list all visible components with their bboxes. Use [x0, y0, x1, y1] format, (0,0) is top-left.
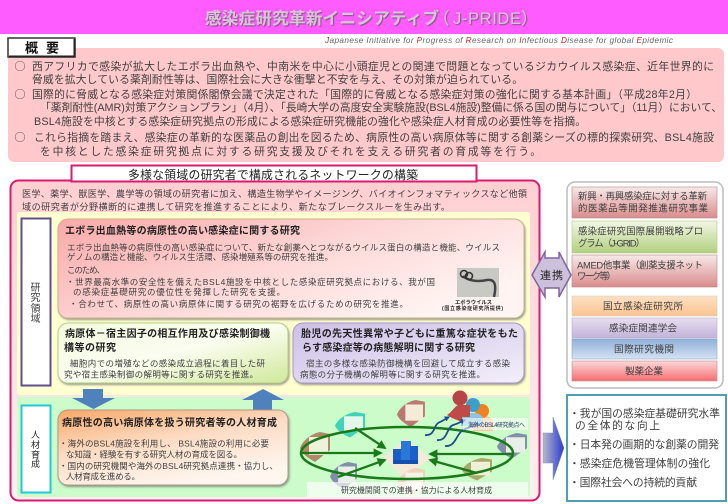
icon: building brown top	[397, 400, 425, 427]
panel: network	[10, 180, 540, 500]
label: human resources: 育	[31, 449, 40, 460]
heading: overview label: 概 要	[25, 40, 59, 56]
panel: Ebola research: エボラ出血熱等の病原性の高い感染症に関する研究	[65, 224, 300, 237]
partner: J-GRID	[572, 221, 717, 253]
title bar: ）	[521, 9, 538, 28]
label: research area: 領	[30, 302, 40, 315]
panel: outcomes: ・我が国の感染症基礎研究水準	[569, 406, 720, 420]
partner: NIID: 国立感染症研究所	[603, 300, 683, 312]
diagram: collaboration network	[300, 390, 528, 497]
panel: human resource development: 病原性の高い病原体を扱う研究者等の人材育成	[62, 416, 277, 429]
partner: societies	[572, 318, 717, 338]
intro text	[22, 188, 527, 212]
partner: J-GRID: グラム（J-GRID）	[578, 238, 645, 248]
label: research area: 究	[30, 291, 40, 304]
subtitle: Japanese Initiative for Progress of Research on Infectious Disease for global Epidemic	[324, 36, 673, 45]
partner: emerging disease programme	[572, 187, 717, 218]
icon: faded building bottom	[397, 468, 425, 496]
panel: Ebola research: エボラ出血熱等の病原性の高い感染症について、新たな創薬へとつながるウイルス蛋白の構造と機能、ウイルス	[67, 242, 500, 252]
panel: Ebola research: ・合わせて、病原性の高い病原体に関する研究の裾野を広げるための研究を推進。	[69, 299, 408, 309]
panel: fetal disorder research	[293, 323, 524, 383]
panel: overview	[8, 48, 724, 162]
panel: fetal disorder research: らす感染症等の病態解明に関する研究	[302, 341, 475, 354]
icon: building teal	[335, 412, 365, 438]
title bar: （	[433, 9, 450, 28]
overview text: を中核とした感染症研究拠点に対する研究支援及びそれを支える研究者の育成等を行う。	[40, 144, 541, 158]
partner: AMED	[572, 255, 717, 287]
band: research area	[17, 212, 530, 395]
overview text: 国際的に脅威となる感染症対策関係閣僚会議で決定された「国際的に脅威となる感染症対策の強化に関する基本計画」（平成28年2月）	[32, 87, 697, 101]
partner: emerging disease programme: 新興・再興感染症に対する革新	[578, 190, 707, 202]
panel: Ebola research: の感染症基礎研究の優位性を発揮した研究を支援。	[73, 287, 285, 297]
partner: J-GRID: 感染症研究国際展開戦略プロ	[578, 226, 703, 236]
partner: societies: 感染症関連学会	[609, 322, 677, 334]
icon: building blue-grey left	[330, 462, 357, 489]
arrow: down	[72, 389, 115, 409]
overview text: BSL4施設を中核とする感染症研究拠点の形成による感染症研究機能の強化や感染症人材育成の必要性等を指摘。	[34, 114, 586, 128]
panel: outcomes: ・日本発の画期的な創薬の開発	[569, 437, 719, 451]
partner: pharma	[572, 361, 717, 381]
label: research area	[22, 218, 50, 386]
icon: building brown left	[300, 432, 330, 462]
center diamond	[383, 438, 430, 480]
panel: human resource development: な知識・経験を有する研究人材の育成を図る。	[66, 450, 242, 460]
arrow: collaboration	[532, 252, 571, 297]
panel: fetal disorder research: 病態の分子機構の解明等に関する研究を推進。	[300, 370, 485, 380]
partner: pharma: 製薬企業	[625, 366, 663, 378]
icon: building blue-grey right	[497, 433, 527, 458]
panel: human resource development: ・国内の研究機関や海外のBSL4研究拠点連携・協力し、	[59, 461, 278, 471]
caption: Ebola virus: エボラウイルス	[455, 298, 492, 306]
panel: Ebola research: ・世界最高水準の安全性を備えたBSL4施設を中核とした感染症研究拠点における、我が国	[66, 277, 435, 287]
partner: international institutes	[572, 339, 717, 359]
partner: AMED: AMED他事業（創薬支援ネット	[577, 260, 703, 270]
title bar	[0, 0, 728, 34]
image: Ebola virus	[457, 268, 499, 297]
caption: Ebola virus: (国立感染症研究所提供)	[442, 305, 503, 312]
partner: NIID	[572, 296, 717, 316]
band: human resources	[17, 397, 530, 497]
title bar: J-PRIDE	[453, 10, 521, 28]
bottom caption	[307, 482, 528, 497]
overview text: ○	[14, 86, 26, 102]
label: human resources: 材	[31, 439, 40, 450]
heading: network	[72, 166, 476, 182]
network ring	[301, 427, 513, 479]
arrow: up	[242, 389, 284, 411]
panel: Ebola research	[58, 219, 524, 318]
panel: host factor research: 病原体－宿主因子の相互作用及び感染制御機	[65, 327, 270, 340]
panel: human resource development: ・海外のBSL4施設を利用し、 BSL4施設の利用に必要	[59, 438, 269, 448]
panel: human resource development: 人材育成を進める。	[66, 472, 140, 482]
partner: emerging disease programme: 的医薬品等開発推進研究事業	[578, 202, 709, 214]
network arrows	[302, 428, 513, 477]
label: human resources: 成	[31, 458, 40, 469]
label: human resources: 人	[31, 430, 40, 440]
icon: researchers	[447, 390, 493, 431]
panel: outcomes: の全体的な向上	[575, 418, 660, 432]
caption: Ebola virus	[442, 298, 503, 312]
panel: fetal disorder research: 宿主の多様な感染防御機構を回避して成立する感染	[306, 358, 510, 368]
panel: host factor research	[58, 323, 288, 383]
partner: international institutes: 国際研究機関	[614, 344, 674, 356]
label: research area: 研	[30, 282, 40, 294]
label: human resources	[22, 406, 50, 492]
panel: Ebola research: ゲノムの構造と機能、ウイルス生活環、感染増殖系等の研究を推進。	[67, 252, 333, 262]
overview text	[14, 58, 722, 158]
icon: central building	[393, 441, 418, 464]
panel: human resource development	[58, 410, 288, 485]
label: research area: 域	[30, 312, 40, 325]
heading: network: 多様な領域の研究者で構成されるネットワークの構築	[128, 168, 418, 182]
arrow: outcomes	[543, 417, 564, 480]
panel: outcomes	[567, 395, 726, 501]
panel: host factor research: 究や宿主感染制御の解明等に関する研究を推進。	[64, 370, 258, 380]
overview text: 西アフリカで感染が拡大したエボラ出血熱や、中南米を中心に小頭症児との関連で問題となっているジカウイルス感染症、近年世界的に	[32, 59, 714, 73]
overseas label	[463, 418, 528, 430]
panel: fetal disorder research: 胎児の先天性異常や子どもに重篤な症状をもた	[301, 327, 518, 340]
bottom caption: 研究機関間での連携・協力による人材育成	[341, 485, 492, 495]
panel: Ebola research: このため、	[67, 265, 105, 275]
icon: building olive	[462, 458, 492, 480]
overview text: これら指摘を踏まえ、感染症の革新的な医薬品の創出を図るため、病原性の高い病原体等に関する創薬シーズの標的探索研究、BSL4施設	[34, 130, 714, 144]
title bar: 感染症研究革新イニシアティブ	[205, 8, 440, 28]
overview text: ○	[14, 58, 26, 74]
intro text: 域の研究者が分野横断的に連携して研究を推進することにより、新たなブレークスルーを生み出す。	[22, 201, 450, 212]
overview text: 「薬剤耐性(AMR)対策アクションプラン」（4月）、「長崎大学の高度安全実験施設(BSL4施設)整備に係る国の関与について」（11月）において、	[40, 100, 722, 114]
panel: host factor research: 細胞内での増殖などの感染成立過程に着目した研	[70, 358, 265, 368]
overseas label: 海外のBSL4研究拠点へ	[468, 421, 525, 429]
overview text: 脅威を拡大している薬剤耐性等は、国際社会に大きな衝撃と不安を与え、その対策が迫られている。	[32, 72, 523, 86]
panel: partners	[567, 182, 723, 388]
heading: overview label	[8, 38, 75, 57]
overview text: ○	[14, 129, 26, 145]
partner: AMED: ワーク等）	[577, 270, 616, 282]
panel: outcomes: ・国際社会への持続的貢献	[569, 475, 697, 489]
panel: host factor research: 構等の研究	[64, 341, 116, 354]
intro text: 医学、薬学、獣医学、農学等の領域の研究者に加え、構造生物学やイメージング、バイオインフォマティックスなど他領	[22, 188, 527, 199]
arrow: collaboration: 連携	[540, 268, 563, 282]
icon: wave arrows	[425, 417, 479, 446]
panel: outcomes: ・感染症危機管理体制の強化	[569, 456, 710, 470]
